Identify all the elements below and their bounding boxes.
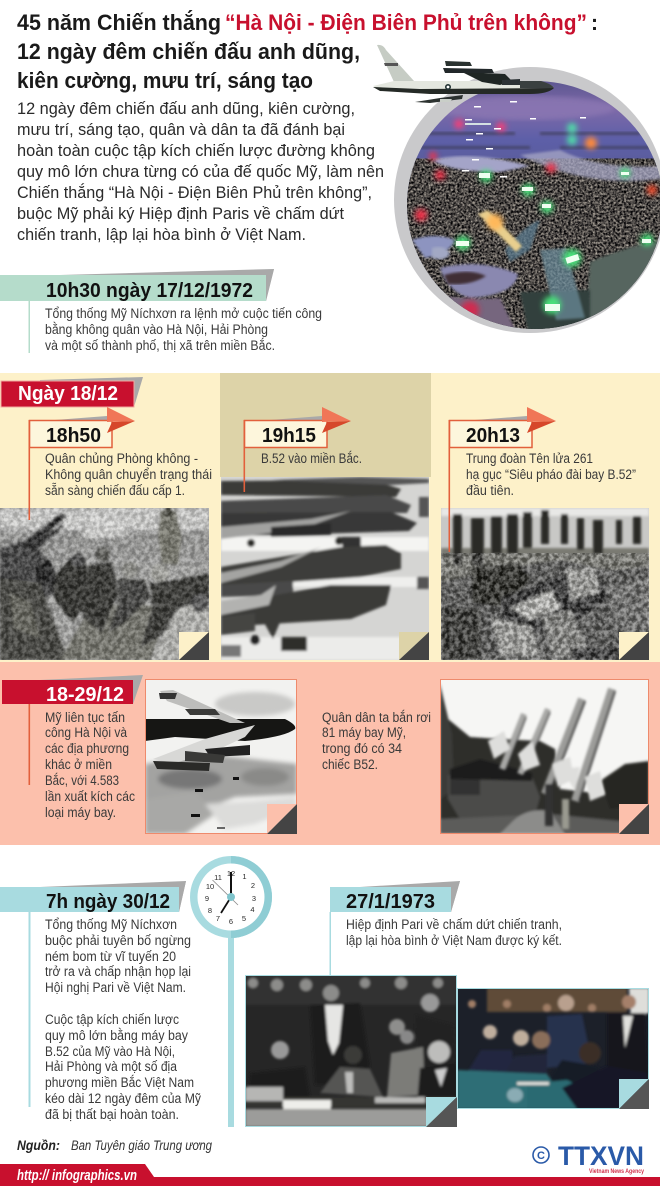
panel: 7h ngày 30/12 xyxy=(0,881,201,1122)
badge: Ngày 18/12: Ngày 18/12 xyxy=(18,383,118,405)
text: ceasefire: đã bị thất bại hoàn toàn. xyxy=(45,1107,179,1122)
text: shot down: chiếc B52. xyxy=(322,757,378,772)
fold corner xyxy=(267,804,297,834)
icon: clock: 1 xyxy=(242,872,247,881)
panel: header and introduction xyxy=(17,10,660,340)
text: raids: Bắc, với 4.583 xyxy=(45,773,119,788)
text: ceasefire: Tổng thống Mỹ Níchxơn xyxy=(45,917,177,932)
panel: 10h30 ngày 17/12/1972 xyxy=(0,269,322,353)
text: ceasefire: kéo dài 12 ngày đêm của Mỹ xyxy=(45,1091,201,1106)
text: raids: Mỹ liên tục tấn xyxy=(45,710,125,725)
panel: 18-29/12 xyxy=(0,662,660,845)
panel: 27/1/1973: Hiệp định Pari về chấm dứt chiến tranh, xyxy=(346,917,562,932)
time block 18h50: sẵn sàng chiến đấu cấp 1. xyxy=(45,483,185,498)
title: 12 ngày đêm chiến đấu anh dũng, xyxy=(17,39,360,64)
text: raids: khác ở miền xyxy=(45,757,112,772)
source: Nguồn: xyxy=(17,1137,60,1153)
title: “Hà Nội - Điện Biên Phủ trên không” xyxy=(225,10,587,35)
intro text: chiến tranh, lập lại hòa bình ở Việt Nam. xyxy=(17,225,306,244)
icon: clock: 2 xyxy=(251,881,255,890)
panel: Ngày 18/12 xyxy=(0,373,660,662)
icon: clock: 9 xyxy=(205,894,209,903)
photo: B-52 wreckage xyxy=(441,508,649,660)
text: ceasefire: Hội nghị Pari về Việt Nam. xyxy=(45,980,186,995)
text: ceasefire: buộc phải tuyên bố ngừng xyxy=(45,933,191,948)
text: raids: công Hà Nội và xyxy=(45,725,127,740)
icon: clock xyxy=(190,856,272,1127)
title: kiên cường, mưu trí, sáng tạo xyxy=(17,68,313,93)
time block 19h15 xyxy=(244,407,362,492)
text: raids: các địa phương xyxy=(45,741,129,756)
time block 20h13: đầu tiên. xyxy=(466,483,514,498)
panel: 10h30 ngày 17/12/1972: bằng không quân vào Hà Nội, Hải Phòng xyxy=(45,322,268,337)
panel: 27/1/1973 xyxy=(245,881,649,1127)
title xyxy=(17,10,598,93)
text: raids: loại máy bay. xyxy=(45,805,116,820)
text: ceasefire: phương miền Bắc Việt Nam xyxy=(45,1075,194,1090)
icon: clock: 5 xyxy=(242,914,246,923)
intro text: hoàn toàn cuộc tập kích chiến lược đường không xyxy=(17,141,375,160)
photo: Paris signing colour xyxy=(458,989,648,1108)
text: ceasefire: trở ra và chấp nhận họp lại xyxy=(45,964,191,979)
logo: TTXVN xyxy=(533,1141,644,1175)
icon: clock: 4 xyxy=(250,905,255,914)
photo: Paris signing black and white xyxy=(246,976,456,1126)
icon: clock: 10 xyxy=(206,882,214,891)
icon: clock: 7 xyxy=(216,914,220,923)
text: ceasefire: quy mô lớn bằng máy bay xyxy=(45,1028,188,1043)
text: ceasefire: Cuộc tập kích chiến lược xyxy=(45,1012,179,1027)
lights xyxy=(415,119,657,319)
badge: 18-29/12 xyxy=(2,675,143,706)
intro text xyxy=(17,99,384,244)
intro text: 12 ngày đêm chiến đấu anh dũng, kiên cường, xyxy=(17,99,355,118)
time block 18h50 xyxy=(28,407,212,520)
time block 20h13: Trung đoàn Tên lửa 261 xyxy=(466,451,593,466)
intro text: quy mô lớn chưa từng có của đế quốc Mỹ, làm nên xyxy=(17,162,384,181)
panel: 10h30 ngày 17/12/1972: 10h30 ngày 17/12/1972 xyxy=(46,279,253,302)
text: shot down: trong đó có 34 xyxy=(322,741,403,756)
intro text: Chiến thắng “Hà Nội - Điện Biên Phủ trên không”, xyxy=(17,183,372,202)
text: raids xyxy=(45,710,135,820)
fold corner xyxy=(619,804,649,834)
source: Ban Tuyên giáo Trung ương xyxy=(71,1138,212,1153)
time block 18h50: 18h50 xyxy=(46,424,101,447)
panel: 27/1/1973: 27/1/1973 xyxy=(346,890,435,913)
photo: SAM missile launchers xyxy=(441,680,648,833)
panel: 27/1/1973: lập lại hòa bình ở Việt Nam được ký kết. xyxy=(346,933,562,948)
footer bar xyxy=(0,1164,660,1186)
photo: B-52 dropping bombs xyxy=(146,680,296,833)
photo: anti-aircraft soldiers xyxy=(0,508,209,660)
text: shot down xyxy=(322,710,431,772)
logo: TTXVN: TTXVN xyxy=(558,1141,644,1171)
time block 20h13 xyxy=(448,407,636,552)
text: raids: lần xuất kích các xyxy=(45,789,135,804)
text: ceasefire: ném bom từ vĩ tuyến 20 xyxy=(45,949,176,964)
icon: globe night map of Hanoi xyxy=(394,67,660,340)
text: shot down: Quân dân ta bắn rơi xyxy=(322,710,431,725)
intro text: buộc Mỹ phải ký Hiệp định Paris về chấm dứt xyxy=(17,204,344,223)
title: : xyxy=(591,10,598,35)
time block 20h13: 20h13 xyxy=(466,424,520,447)
icon: B-52 bomber xyxy=(373,45,554,103)
badge: 18-29/12: 18-29/12 xyxy=(46,684,124,706)
icon: clock: 12 xyxy=(227,869,235,878)
time block 18h50: Không quân chuyển trạng thái xyxy=(45,467,212,482)
fold corners xyxy=(426,1079,649,1127)
panel: 10h30 ngày 17/12/1972: Tổng thống Mỹ Níchxơn ra lệnh mở cuộc tiến công xyxy=(45,306,322,321)
footer bar: http:// infographics.vn xyxy=(17,1168,137,1184)
icon: clock: 3 xyxy=(252,894,256,903)
panel: 7h ngày 30/12: 7h ngày 30/12 xyxy=(46,890,170,913)
text: ceasefire xyxy=(45,917,201,1122)
text: ceasefire: Hải Phòng và một số địa xyxy=(45,1059,177,1074)
intro text: mưu trí, sáng tạo, quân và dân ta đã đánh bại xyxy=(17,120,345,139)
logo: TTXVN: Vietnam News Agency xyxy=(589,1168,644,1175)
time block 19h15: B.52 vào miền Bắc. xyxy=(261,451,362,466)
icon: clock: 6 xyxy=(229,917,233,926)
photo: parked B-52 row xyxy=(221,477,429,660)
source xyxy=(17,1137,212,1153)
title: 45 năm Chiến thắng xyxy=(17,10,221,35)
panel: 10h30 ngày 17/12/1972: và một số thành phố, thị xã trên miền Bắc. xyxy=(45,338,275,353)
badge: Ngày 18/12 xyxy=(1,377,143,407)
icon: clock: 8 xyxy=(208,906,212,915)
text: ceasefire: B.52 của Mỹ vào Hà Nội, xyxy=(45,1044,175,1059)
time block 18h50: Quân chủng Phòng không - xyxy=(45,451,198,466)
photo fold corners xyxy=(179,632,649,660)
time block 20h13: hạ gục “Siêu pháo đài bay B.52” xyxy=(466,467,636,482)
time block 19h15: 19h15 xyxy=(262,424,316,447)
logo: TTXVN: C xyxy=(537,1150,545,1162)
text: shot down: 81 máy bay Mỹ, xyxy=(322,725,406,740)
icon: clock: 11 xyxy=(214,873,222,882)
